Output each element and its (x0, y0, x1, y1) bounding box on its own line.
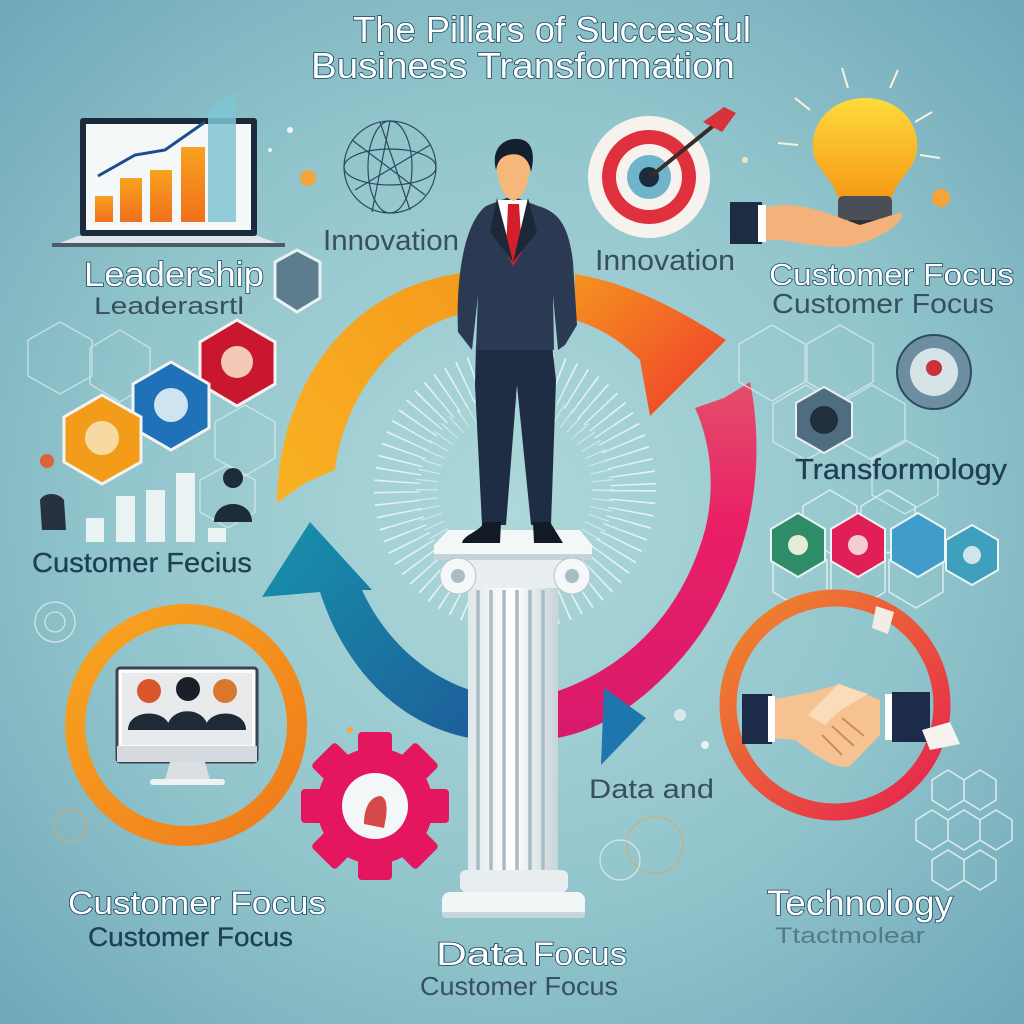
arrow: magenta arc (555, 382, 757, 738)
label: Customer Focus top right: Customer Focus (769, 257, 1014, 292)
label: Technology (767, 884, 954, 948)
arrow: orange arc (277, 272, 470, 503)
icon: magenta gear (301, 732, 449, 880)
label: Technology: Ttactmolear (775, 923, 925, 948)
label: Data and: Data and (589, 774, 714, 804)
label: Leadership: Leaderasrtl (94, 293, 244, 320)
title (311, 9, 751, 86)
label: Innovation right: Innovation (595, 245, 735, 277)
arrow: small blue triangle (601, 688, 646, 765)
icon: red ring with handshake (728, 598, 960, 812)
icon: wire globe (344, 121, 436, 213)
title: Business Transformation (311, 45, 735, 86)
icon: laptop with bar chart (52, 92, 285, 247)
label: Data Focus: Focus (533, 936, 627, 972)
arrow: orange to red arc (575, 274, 726, 416)
hexagon group: left (28, 320, 275, 542)
icon: orange ring with monitor (75, 614, 297, 836)
label: Customer Focus left: Customer Fecius (32, 547, 252, 578)
icon: small hexagon (275, 250, 320, 312)
label: Customer Focus bottom left (68, 885, 326, 952)
label: Data Focus: Data (436, 936, 526, 972)
label: Customer Focus top right: Customer Focus (772, 288, 994, 319)
decorative dots (268, 127, 950, 749)
label: Transformology: Transformology (795, 454, 1008, 486)
arrow: blue arc (262, 522, 470, 738)
label: Data Focus (420, 936, 627, 1001)
figure: businessman (458, 139, 577, 543)
pillar (434, 530, 592, 918)
hexagon group: right top (739, 325, 971, 514)
icon: white hexagon mesh (916, 770, 1012, 890)
label: Innovation left: Innovation (323, 225, 459, 257)
title: The Pillars of Successful (353, 9, 751, 50)
label: Leadership: Leadership (84, 256, 264, 294)
label: Customer Focus top right (769, 257, 1014, 319)
hexagon group: right bottom (771, 490, 998, 608)
label: Leadership (84, 256, 264, 320)
label: Customer Focus bottom left: Customer Focus (68, 885, 326, 921)
label: Data Focus: Customer Focus (420, 971, 618, 1001)
label: Technology: Technology (767, 884, 954, 923)
decorative outlines (35, 602, 683, 880)
sparkle rays (397, 372, 633, 608)
icon: light bulb on hand (730, 68, 940, 247)
label: Customer Focus bottom left: Customer Focus (88, 922, 293, 952)
icon: target with arrow (588, 107, 736, 238)
